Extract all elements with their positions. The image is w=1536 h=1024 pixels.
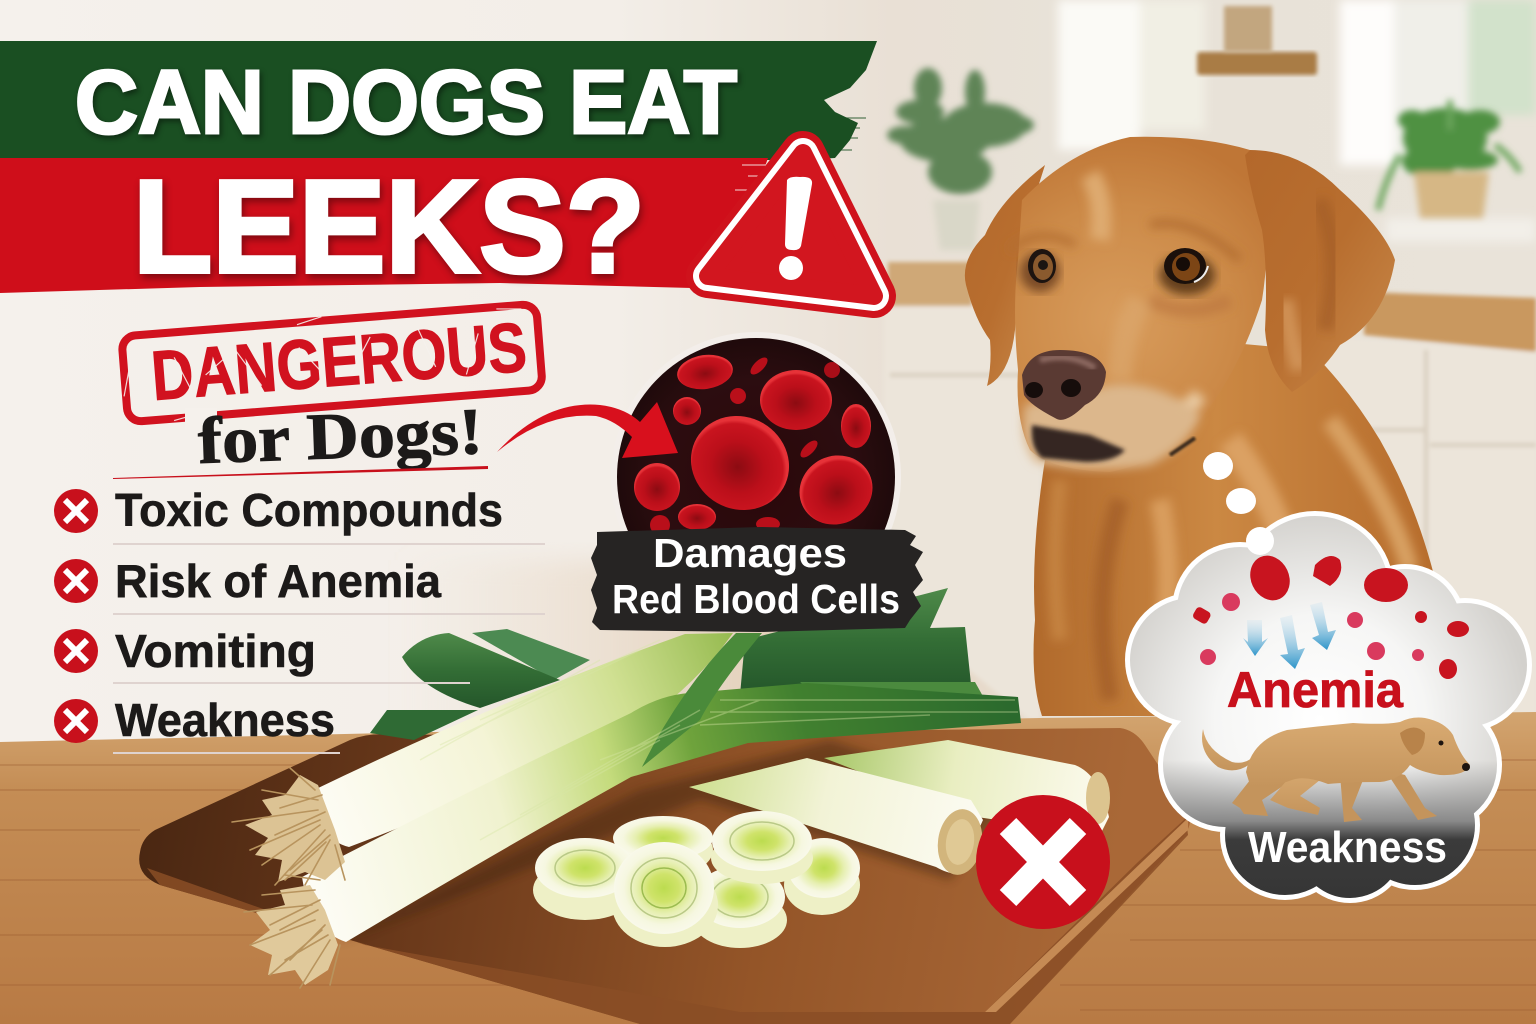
counter xyxy=(884,262,1536,720)
title line two: LEEKS? xyxy=(133,153,645,300)
thought bubble dots xyxy=(1203,452,1256,514)
small weak dog xyxy=(1202,718,1470,822)
shadow under leeks xyxy=(330,740,1010,945)
green banner xyxy=(0,41,877,160)
leek roots xyxy=(232,768,345,988)
dog xyxy=(965,137,1440,716)
leek stalks xyxy=(302,633,1110,942)
dog body xyxy=(1034,340,1440,716)
list item: weakness: Weakness xyxy=(115,694,335,746)
dog left ear xyxy=(965,165,1045,386)
weakness label: Weakness xyxy=(1248,823,1447,872)
dog muzzle and nose xyxy=(1022,350,1200,469)
title banner xyxy=(0,41,877,300)
red underline xyxy=(113,466,488,479)
plants xyxy=(887,68,1520,250)
icon: red X over leeks xyxy=(976,795,1110,929)
list separators xyxy=(113,544,545,753)
title line one: CAN DOGS EAT xyxy=(75,53,737,153)
list item: toxic compounds: Toxic Compounds xyxy=(115,484,503,536)
damages label: Damages xyxy=(653,530,847,576)
anemia label: Anemia xyxy=(1227,662,1404,718)
red banner xyxy=(0,158,770,293)
leek leaves behind xyxy=(370,588,985,740)
damages label: Red Blood Cells xyxy=(612,576,900,622)
icon: warning triangle xyxy=(708,153,874,296)
bubble red cells xyxy=(1192,549,1469,679)
thought bubble: anemia and weakness xyxy=(1120,510,1536,905)
leek ribs xyxy=(420,640,1018,840)
dangerous stamp: DANGEROUS xyxy=(148,308,529,415)
bubble blue arrows xyxy=(1243,602,1336,669)
list item: risk of anemia: Risk of Anemia xyxy=(115,555,441,607)
list item: vomiting: Vomiting xyxy=(115,625,316,677)
leeks xyxy=(232,588,1110,988)
damages label xyxy=(591,527,923,632)
arrow to blood cells xyxy=(497,402,678,458)
blood cell circle xyxy=(617,332,901,531)
wooden table xyxy=(0,712,1536,1024)
leek slices xyxy=(533,811,860,948)
list: effects xyxy=(54,484,503,746)
dog head xyxy=(1015,137,1266,472)
dog eyes xyxy=(1020,248,1215,295)
dog right ear xyxy=(1245,150,1395,392)
for Dogs text: for Dogs! xyxy=(197,395,484,478)
cutting board xyxy=(139,728,1190,1024)
